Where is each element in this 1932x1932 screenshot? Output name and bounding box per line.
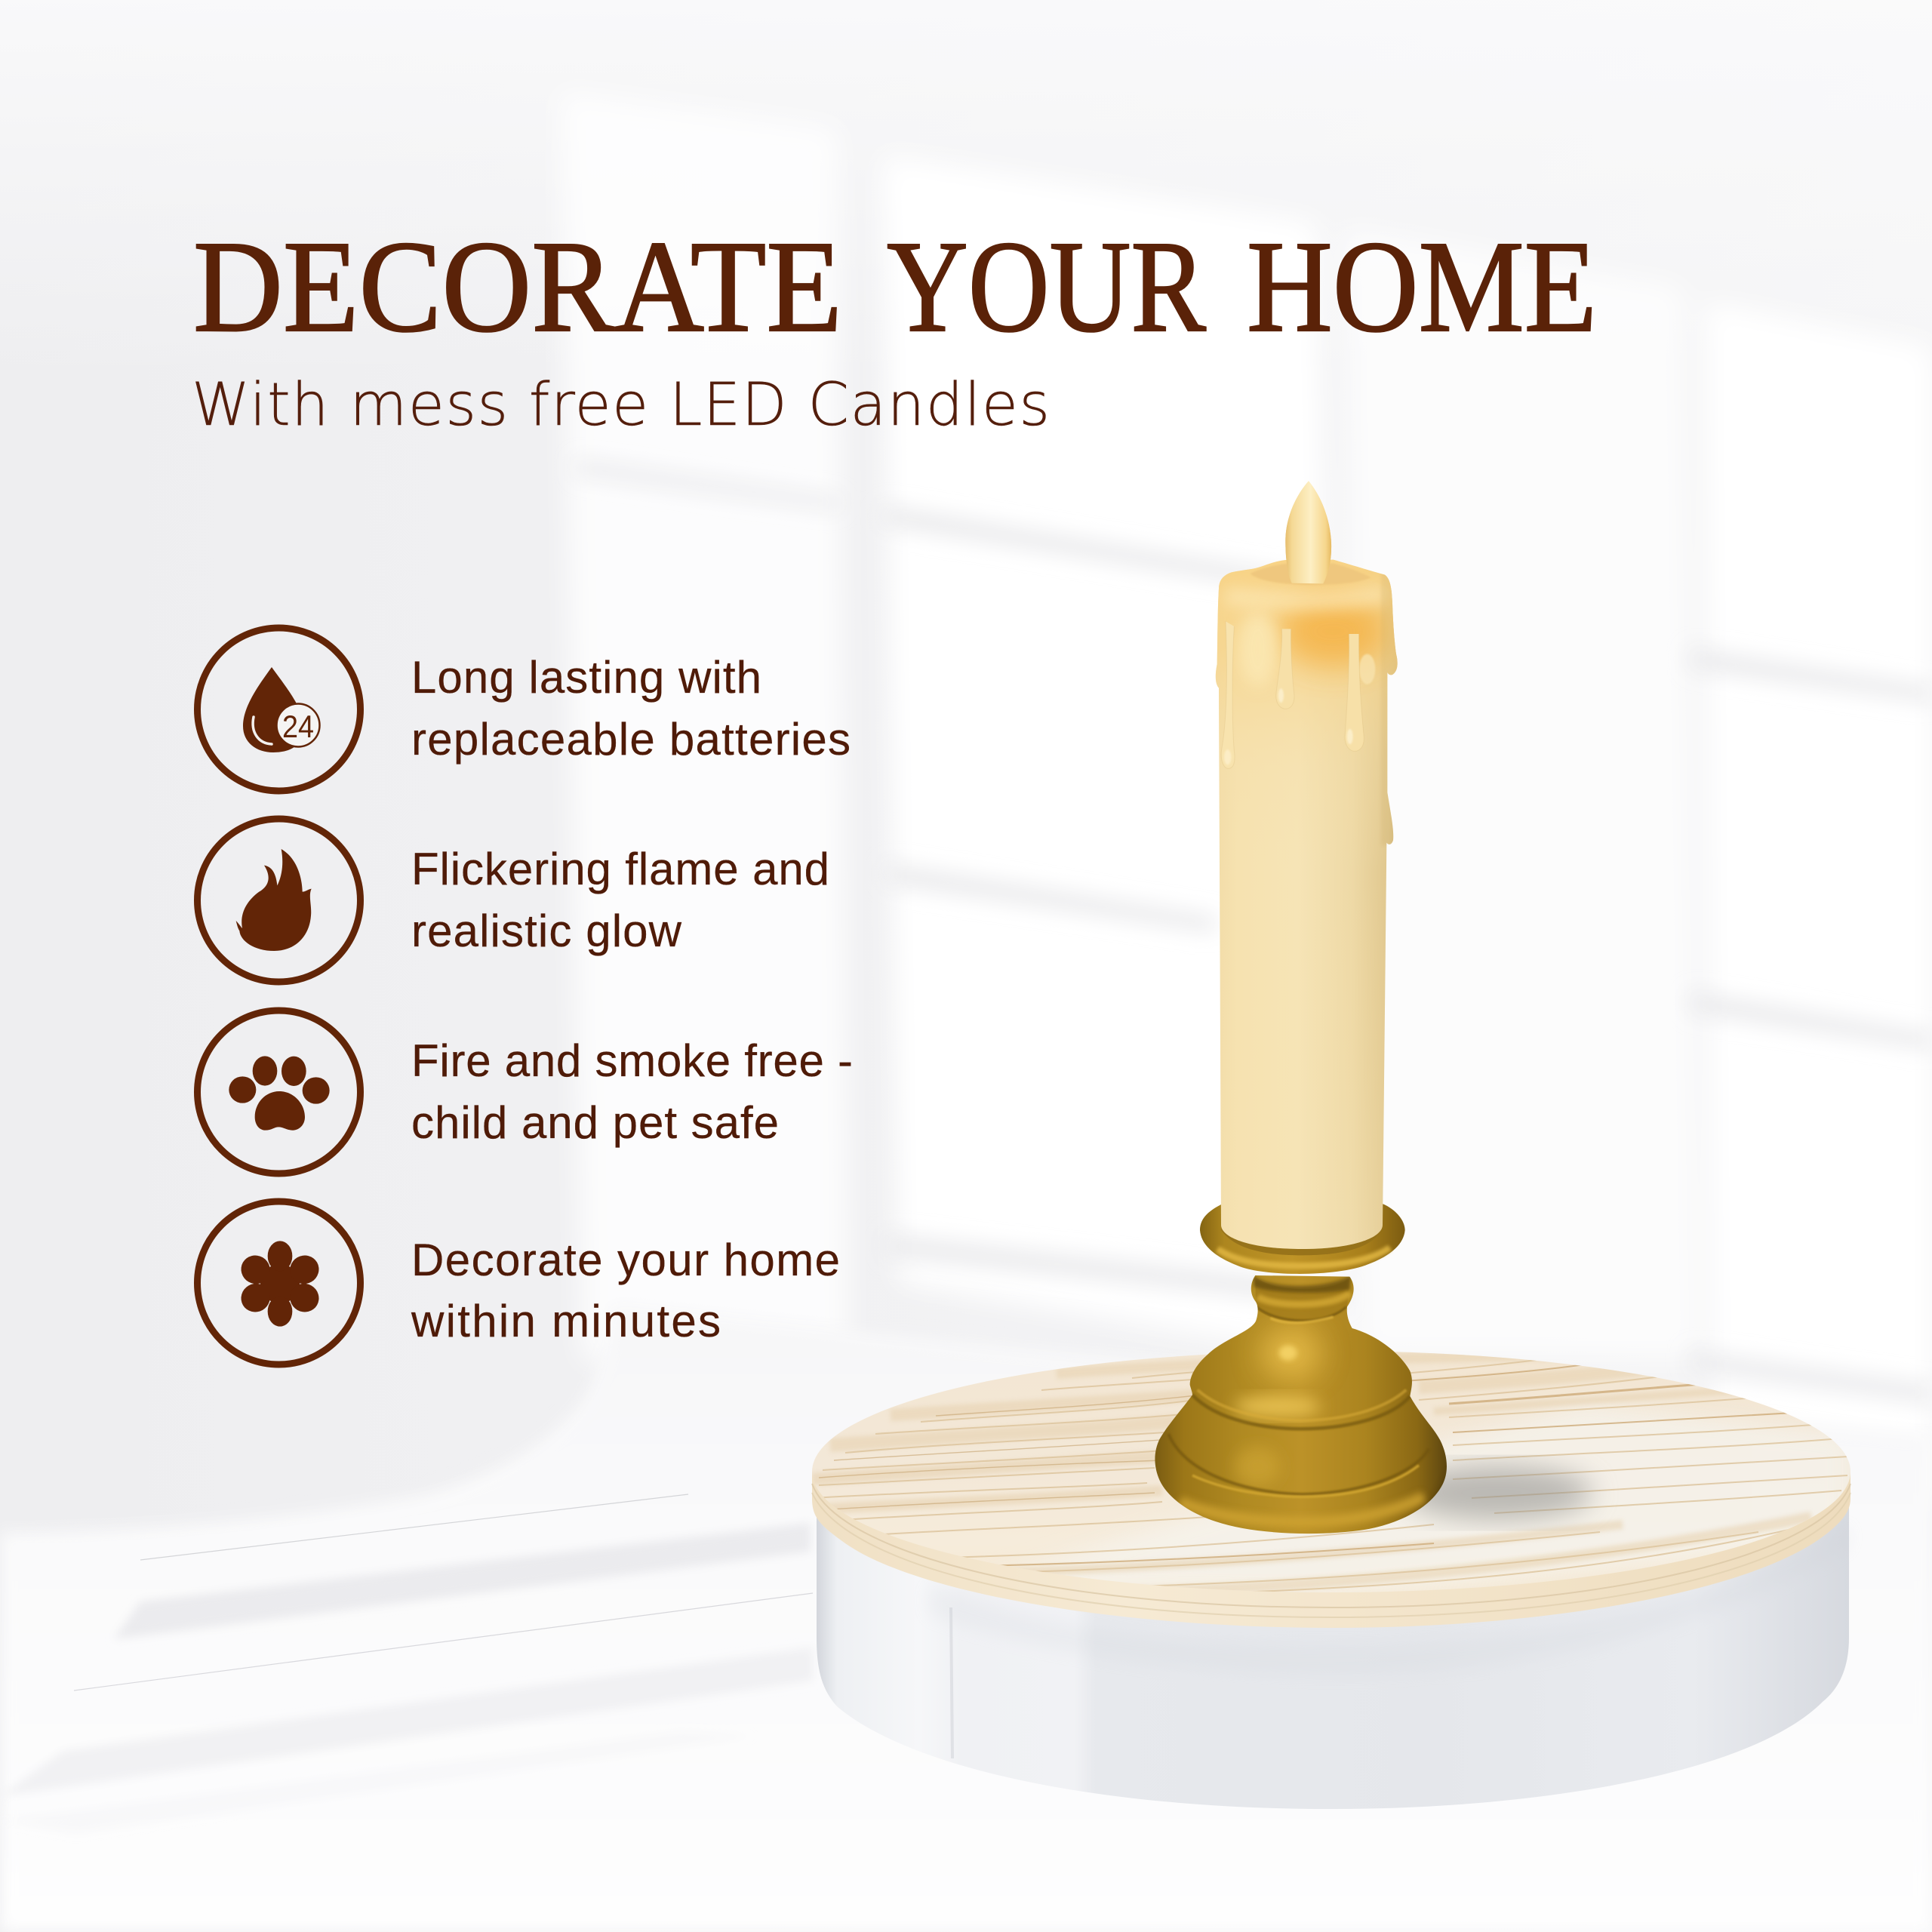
icon: drop with 24 badge: 24 xyxy=(282,709,314,744)
text: fire and smoke free: Fire and smoke free - xyxy=(411,1035,853,1086)
text: fire and smoke free: child and pet safe xyxy=(411,1097,779,1148)
feature: decorate in minutes xyxy=(198,1201,840,1364)
flame front xyxy=(1285,481,1331,583)
title: YOUR xyxy=(887,214,1206,359)
icon: paw xyxy=(198,1011,361,1174)
text: fire and smoke free xyxy=(411,1035,853,1148)
wax drips xyxy=(1221,621,1364,768)
wood rim xyxy=(812,1472,1850,1628)
icon: flower xyxy=(198,1201,361,1364)
platform xyxy=(812,1351,1850,1809)
holder lower body xyxy=(1155,1275,1447,1534)
text: flickering flame xyxy=(411,844,829,956)
text: flickering flame: realistic glow xyxy=(411,906,682,956)
flame back xyxy=(1285,481,1331,586)
icon: drop with 24 badge xyxy=(198,628,361,791)
holder cup rim xyxy=(1200,1204,1405,1274)
text: decorate in minutes: Decorate your home xyxy=(411,1235,840,1285)
title: DECORATE xyxy=(193,214,842,359)
wax body xyxy=(1216,560,1398,1249)
feature: fire and smoke free xyxy=(198,1011,853,1174)
feature: long lasting xyxy=(198,628,851,791)
feature: flickering flame xyxy=(198,819,829,982)
icon: flame xyxy=(198,819,361,982)
text: decorate in minutes xyxy=(411,1235,840,1346)
text: decorate in minutes: within minutes xyxy=(411,1296,721,1346)
text: long lasting: Long lasting with xyxy=(411,652,761,703)
wood top xyxy=(812,1351,1850,1628)
title xyxy=(193,214,1597,359)
candle holder xyxy=(1155,1204,1449,1534)
text: flickering flame: Flickering flame and xyxy=(411,844,829,894)
text: long lasting xyxy=(411,652,851,764)
title: HOME xyxy=(1247,214,1597,359)
floor xyxy=(0,1306,1932,1932)
subtitle: With mess free LED Candles xyxy=(192,371,1050,439)
text: long lasting: replaceable batteries xyxy=(411,714,851,764)
candle xyxy=(1213,481,1398,1253)
white base xyxy=(817,1494,1849,1809)
